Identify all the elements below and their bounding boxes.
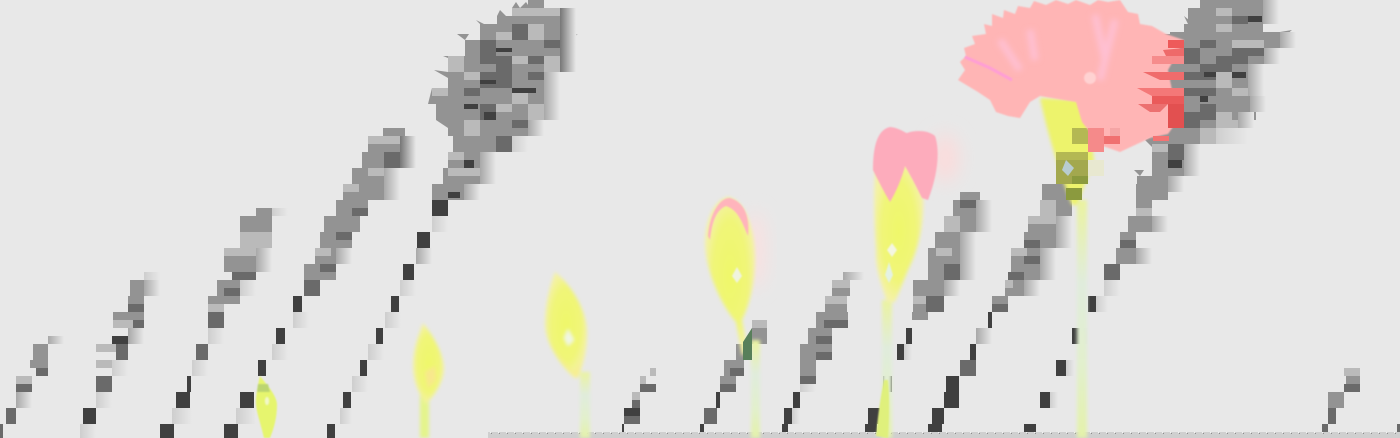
petal teeth bbox=[1134, 1, 1292, 176]
bud body bbox=[705, 197, 755, 356]
grey carnation stem below full flower bbox=[1024, 176, 1184, 432]
pink and yellow half-open carnation bbox=[873, 127, 959, 438]
yellow bud 3 with stem bbox=[545, 272, 590, 438]
stem bbox=[882, 300, 892, 438]
green leaf bbox=[743, 328, 752, 360]
full grey carnation top right bbox=[1134, 0, 1296, 200]
calyx spots bbox=[887, 243, 897, 257]
calyx spot bbox=[732, 267, 742, 283]
yellow bud 1 bbox=[256, 376, 277, 438]
light centre bbox=[1084, 72, 1096, 84]
pink arc bbox=[708, 198, 748, 240]
grey small bud far right bbox=[1322, 368, 1400, 432]
grey carnation bud 4 bbox=[224, 128, 416, 438]
stem bbox=[751, 340, 760, 438]
grey bud with dark leaf bbox=[700, 320, 767, 432]
pink petals bbox=[873, 127, 938, 202]
magenta highlights bbox=[965, 57, 1012, 80]
yellow calyx bbox=[1040, 98, 1094, 205]
pink petals bbox=[958, 0, 1184, 152]
grey small bud near centre bbox=[622, 368, 656, 432]
pink glow bbox=[745, 212, 765, 288]
grey carnation bud 1 bbox=[0, 336, 64, 438]
pink glow bbox=[931, 134, 959, 182]
red petals at grey edge bbox=[1088, 40, 1184, 152]
half-open yellow bud with pink tip bbox=[705, 197, 765, 438]
grey full carnation with stem bbox=[327, 0, 578, 438]
yellow bud 2 with stem bbox=[413, 323, 444, 438]
grey carnation bud 2 bbox=[80, 272, 160, 438]
grey carnation bud 3 bbox=[160, 208, 288, 438]
grey medium bud centre bbox=[782, 272, 864, 432]
full pink carnation with stem bbox=[958, 0, 1184, 438]
olive calyx detail bbox=[1056, 128, 1104, 200]
yellow body bbox=[874, 160, 923, 302]
grey carnation bud 7 bbox=[865, 192, 992, 432]
stem bbox=[1077, 200, 1087, 438]
decorative checker strip along bottom bbox=[488, 432, 1400, 438]
grey carnation bud 8 bbox=[928, 184, 1072, 432]
petal teeth bbox=[428, 0, 578, 152]
